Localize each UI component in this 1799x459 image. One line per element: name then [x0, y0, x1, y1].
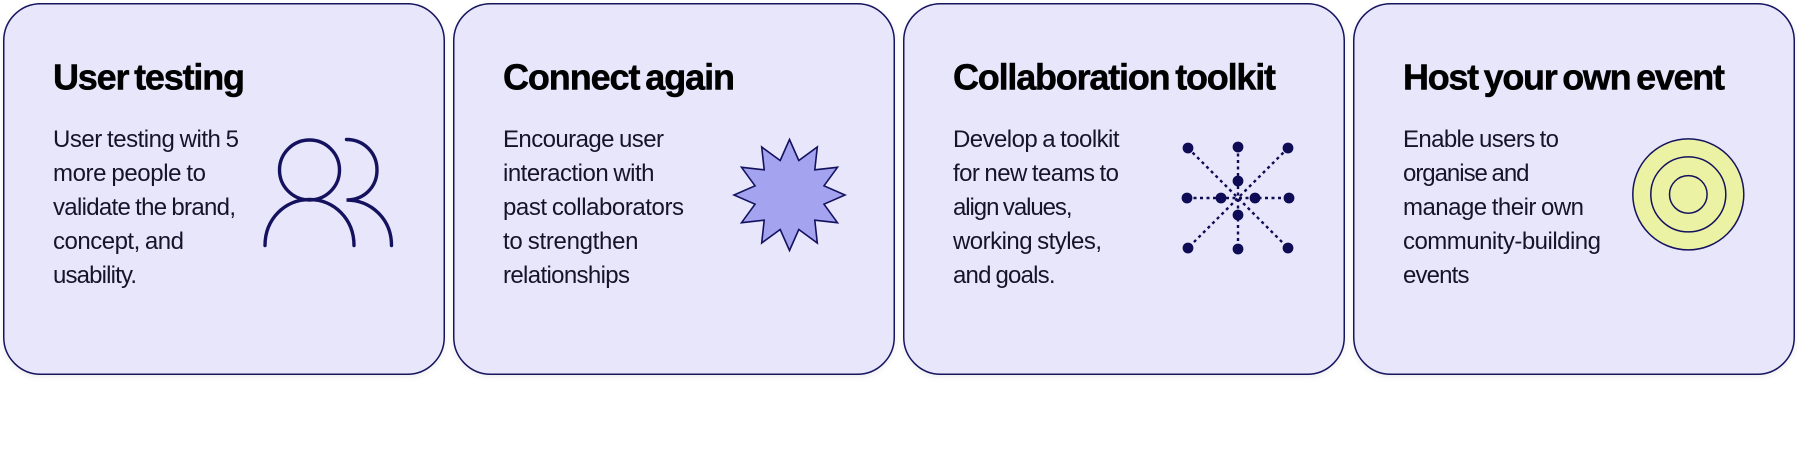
text block: user testing description	[53, 126, 239, 289]
icon: dotted network	[1182, 142, 1294, 254]
text block: connect again description: relationships	[503, 262, 630, 289]
text block: connect again description: Encourage user	[503, 126, 664, 153]
card background: connect again	[454, 4, 894, 374]
card background: host your own event	[1354, 4, 1794, 374]
text block: collaboration toolkit description: Develop a toolkit	[953, 126, 1120, 153]
text block: host your own event description	[1403, 126, 1601, 289]
panel: connect again	[454, 4, 894, 374]
text block: connect again description: to strengthen	[503, 228, 638, 255]
text block: user testing description: concept, and	[53, 228, 184, 255]
icon: starburst	[734, 140, 845, 250]
text block: user testing description: more people to	[53, 160, 206, 187]
text block: collaboration toolkit description: and goals.	[953, 262, 1056, 289]
text block: user testing description: User testing with 5	[53, 126, 239, 153]
text block: collaboration toolkit description: working styles,	[952, 228, 1102, 255]
text block: connect again description: interaction with	[503, 160, 654, 187]
text block: connect again description: past collaborators	[503, 194, 684, 221]
text block: host your own event description: community-building	[1403, 228, 1601, 255]
icon: concentric circles	[1633, 139, 1744, 250]
heading: user testing: User testing	[53, 56, 245, 98]
heading: collaboration toolkit: Collaboration toolkit	[953, 56, 1276, 98]
panel: user testing	[4, 4, 444, 374]
text block: collaboration toolkit description: align values,	[953, 194, 1072, 221]
icon: two people	[265, 140, 392, 246]
text block: host your own event description: Enable users to	[1403, 126, 1559, 153]
heading: host your own event: Host your own event	[1403, 56, 1725, 98]
card background: collaboration toolkit	[904, 4, 1344, 374]
text block: host your own event description: manage their own	[1403, 194, 1584, 221]
heading: connect again: Connect again	[503, 56, 735, 98]
panel: collaboration toolkit	[904, 4, 1344, 374]
text block: host your own event description: events	[1403, 262, 1470, 289]
panel: host your own event	[1354, 4, 1794, 374]
text block: host your own event description: organise and	[1403, 160, 1530, 187]
text block: user testing description: validate the brand,	[53, 194, 236, 221]
card background: user testing	[4, 4, 444, 374]
text block: collaboration toolkit description	[952, 126, 1120, 289]
text block: connect again description	[503, 126, 684, 289]
text block: user testing description: usability.	[53, 262, 137, 289]
text block: collaboration toolkit description: for new teams to	[953, 160, 1119, 187]
